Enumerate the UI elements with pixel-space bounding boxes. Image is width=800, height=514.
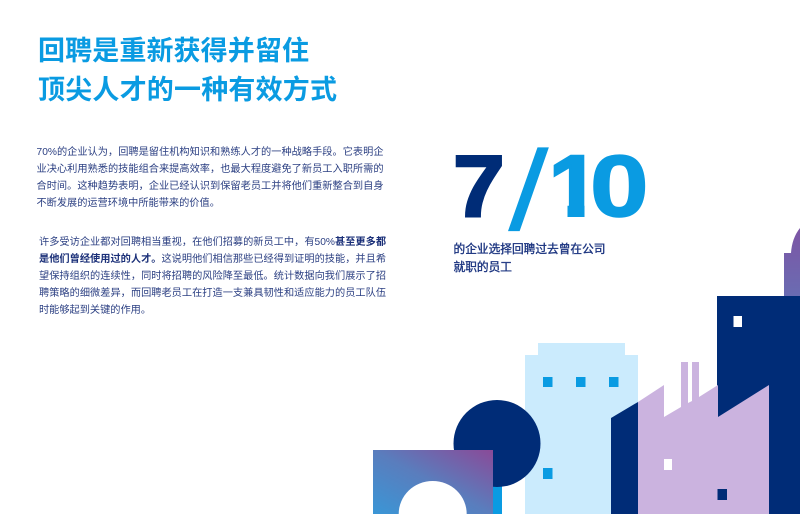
big statistic: 7/10 [456, 147, 646, 232]
text block: paragraph one: 70%的企业认为，回聘是留住机构知识和熟练人才的一种战略手段。它表明企 [36, 143, 384, 158]
big statistic: 7/10: 1 [549, 137, 600, 234]
text block: paragraph two: 时能够起到关键的作用。 [39, 301, 151, 316]
navy tower [717, 296, 800, 514]
text block: paragraph one [36, 143, 384, 209]
text block: paragraph two: 许多受访企业都对回聘相当重视，在他们招募的新员工中，有50%甚至更多都 [39, 233, 386, 248]
text block: paragraph two: 是他们曾经使用过的人才。这说明他们相信那些已经得到证明的技能，并且希 [39, 250, 386, 265]
purple domed tower [784, 228, 800, 296]
gradient square with arch [373, 450, 493, 514]
big statistic: 7/10: 7 [453, 138, 505, 235]
blue bar [490, 480, 502, 514]
text block: paragraph two: 望保持组织的连续性，同时将招聘的风险降至最低。统计数据向我们展示了招 [39, 267, 386, 282]
title: 回聘是重新获得并留住 [38, 36, 309, 66]
title: 顶尖人才的一种有效方式 [38, 74, 337, 105]
light blue building [525, 343, 638, 514]
text block: paragraph one: 业决心利用熟悉的技能组合来提高效率，也最大程度避免了新员工入职所需的 [36, 160, 384, 175]
statistic caption: 的企业选择回聘过去曾在公司 [454, 242, 606, 256]
text block: paragraph one: 不断发展的运营环境中所能带来的价值。 [36, 194, 220, 209]
text block: paragraph two: 聘策略的细微差异，而回聘老员工在打造一支兼具韧性和适应能力的员工队伍 [39, 284, 386, 299]
lilac factory [638, 362, 769, 514]
text block: paragraph one: 合时间。这种趋势表明，企业已经认识到保留老员工并将他们重新整合到自身 [36, 177, 384, 192]
illustration: city skyline [373, 228, 800, 514]
statistic caption: 就职的员工 [454, 260, 512, 274]
text block: paragraph two [39, 233, 386, 316]
navy circle [454, 400, 540, 487]
big statistic: 7/10: 0 [590, 139, 649, 235]
navy slanted wall [611, 402, 638, 514]
title [38, 36, 337, 105]
statistic caption [454, 242, 606, 274]
big statistic: 7/10: / [508, 127, 549, 254]
